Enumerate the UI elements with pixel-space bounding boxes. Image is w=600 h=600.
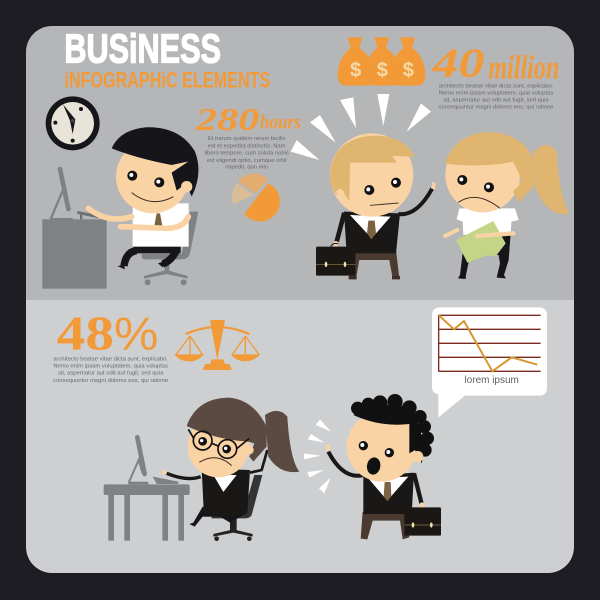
title: Business: BUSiNESS (64, 26, 221, 72)
text block: percent description: consequuntur magni dolores eos, qui ratione (53, 378, 168, 384)
pie chart (232, 174, 280, 221)
folder (456, 221, 506, 263)
text block: million description: Nemo enim ipsam voluptatem, quia voluptas (439, 90, 553, 96)
text block: percent description: architecto beatae vitae dicta sunt, explicabo. (53, 356, 168, 362)
character: blond businessman (316, 133, 436, 279)
icon: wall clock (46, 96, 100, 150)
text block: million description: architecto beatae vitae dicta sunt, explicabo. (439, 83, 554, 89)
stat: 280 hours: hours (260, 111, 301, 133)
stat: 280 hours: 280 (195, 101, 259, 137)
icon: money bags: $ (350, 60, 361, 82)
icon: balance scale (174, 320, 261, 370)
character: curly-haired businessman (326, 394, 441, 539)
text block: hours description (205, 136, 289, 171)
stat: 48 percent: % (114, 307, 158, 359)
emphasis spikes (291, 94, 431, 160)
top-left section (42, 26, 301, 289)
stat: 40 million: million (488, 49, 559, 86)
icon: money bags (338, 37, 425, 86)
chart line (439, 315, 537, 371)
top-right section (291, 37, 569, 279)
text block: percent description: sit, aspernatur aut odit aut fugit, sed quia (58, 371, 164, 377)
subtitle: infographic elements: iNFOGRAPHiC ELEMENTS (64, 68, 270, 93)
character: office worker (88, 127, 198, 269)
stat: 48 percent: 48 (57, 307, 114, 360)
speech bubble with line chart (432, 307, 547, 417)
stat: 48 percent (57, 307, 158, 360)
character: blonde woman with folder (445, 132, 569, 279)
text block: percent description: Nemo enim ipsam voluptatem, quia voluptas (53, 364, 168, 370)
text block: hours description: impedit, quo min (225, 165, 268, 171)
office chair (142, 212, 198, 285)
icon: money bags: $ (403, 60, 414, 82)
chart label: lorem ipsum (464, 375, 519, 386)
character: woman with glasses (162, 398, 299, 527)
text block: million description (438, 83, 554, 111)
chart grid (438, 315, 541, 371)
text block: hours description: est et expedita distinctio. Nam (208, 143, 286, 149)
desk with monitor (104, 437, 190, 541)
stat: 280 hours (195, 101, 301, 137)
bottom-left section (53, 307, 299, 541)
stat: 40 million: 40 (431, 41, 485, 87)
text block: million description: consequuntur magni dolores eos, qui ratione (438, 105, 554, 111)
briefcase (404, 502, 441, 536)
briefcase (316, 243, 355, 276)
bottom-right section (304, 307, 547, 539)
text block: percent description (53, 356, 168, 384)
office chair (212, 475, 262, 541)
icon: money bags: $ (377, 60, 388, 82)
desk with monitor (42, 169, 107, 289)
stat: 40 million (431, 41, 559, 87)
text block: hours description: est eligendi optio, cumque nihil (207, 158, 287, 164)
text block: hours description: Et harum quidem rerum facilis (208, 136, 285, 142)
text block: million description: sit, aspernatur aut odit aut fugit, sed quia (443, 98, 549, 104)
text block: hours description: libero tempore, cum soluta nobis (205, 151, 289, 157)
shout spikes (304, 419, 331, 493)
